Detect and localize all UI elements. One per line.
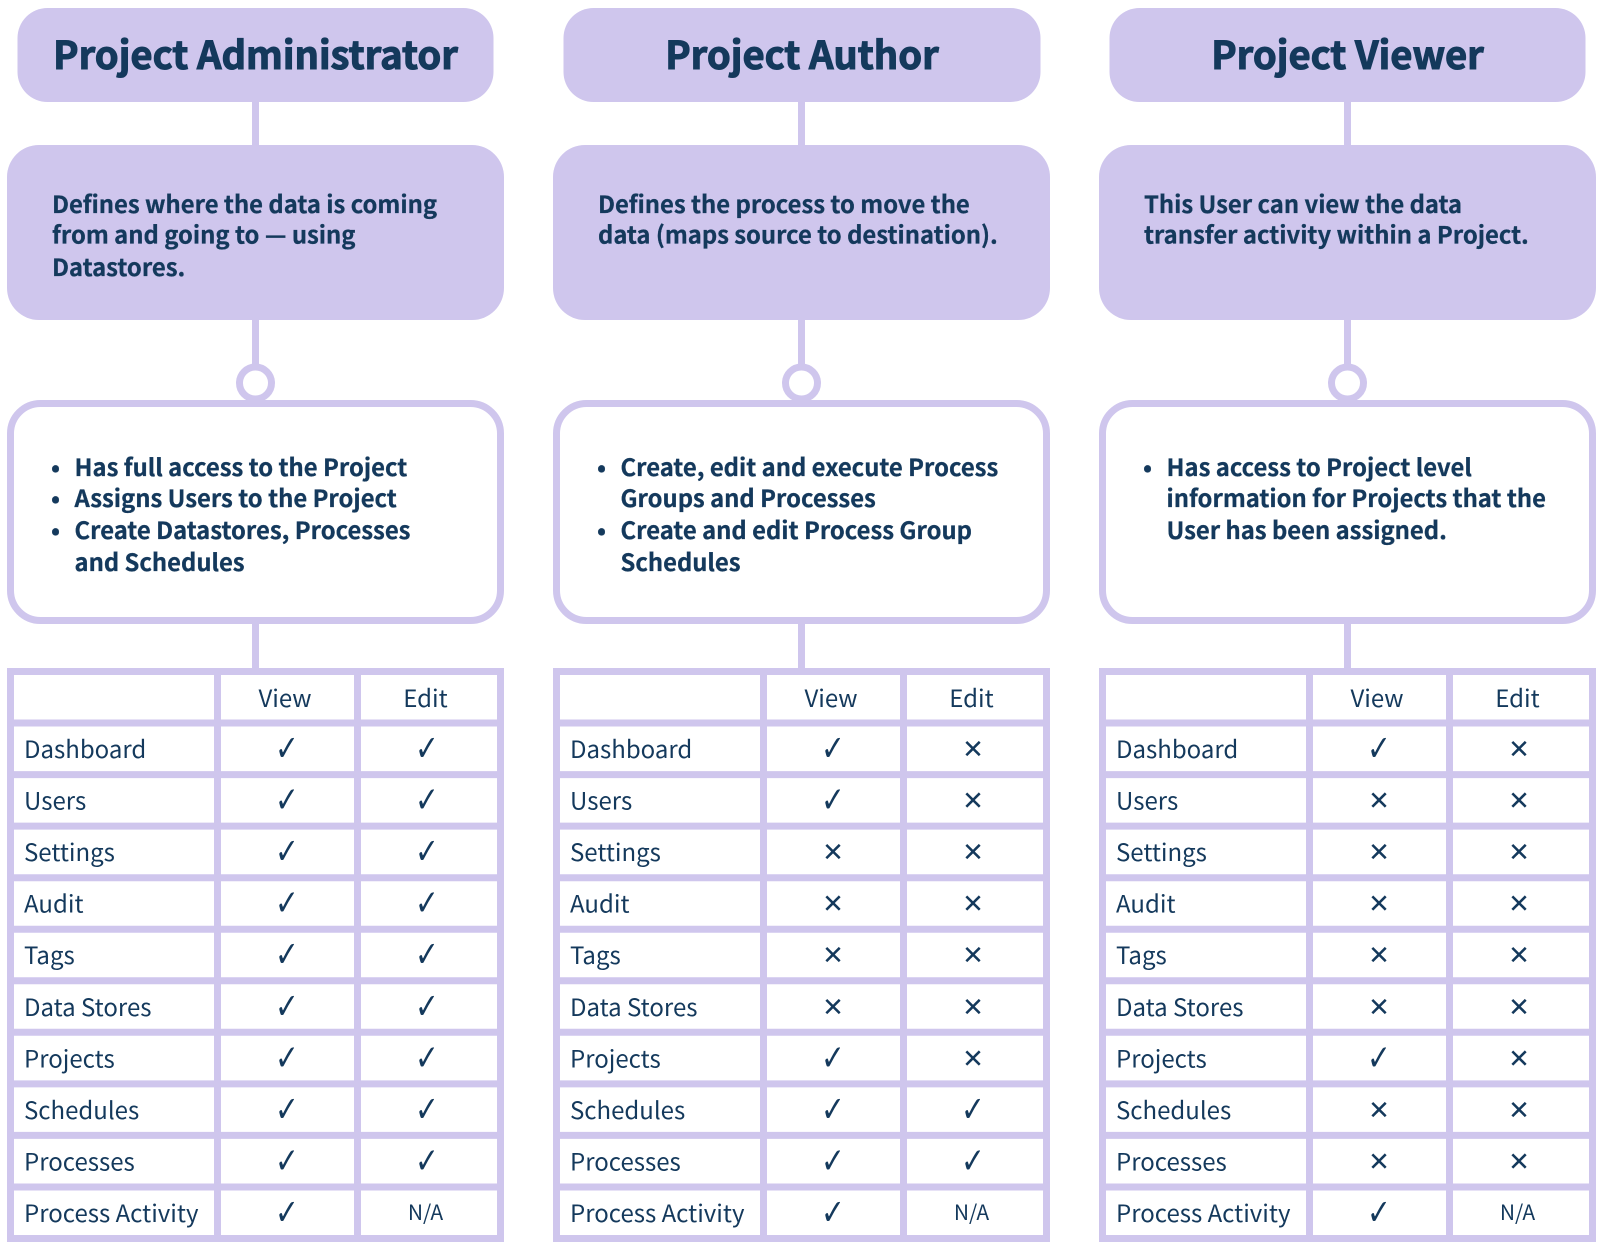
row: Processes: ✓ xyxy=(821,1140,845,1182)
row: Audit: Audit xyxy=(1116,885,1176,920)
table header: Edit xyxy=(1495,679,1540,714)
row: Audit: Audit xyxy=(24,885,84,920)
row: Data Stores: ✕ xyxy=(1368,993,1390,1023)
panel: administrator description: from and going to — using xyxy=(52,216,355,250)
row: Audit: ✕ xyxy=(822,890,844,920)
row: Data Stores xyxy=(570,988,984,1023)
panel: author responsibilities: Schedules xyxy=(620,543,741,578)
row: Processes: ✕ xyxy=(1508,1147,1530,1177)
row: Process Activity: N/A xyxy=(954,1197,989,1227)
row: Processes: Processes xyxy=(24,1142,135,1177)
panel: author responsibilities: Create, edit and execute Process xyxy=(620,448,998,483)
row: Settings: ✕ xyxy=(962,838,984,868)
row: Processes xyxy=(570,1140,985,1182)
row: Users: ✓ xyxy=(821,779,845,821)
row: Settings: ✕ xyxy=(1368,838,1390,868)
table header: View xyxy=(804,679,858,714)
row: Projects: Projects xyxy=(24,1039,115,1074)
panel: administrator responsibilities: Create Datastores, Processes xyxy=(74,511,410,546)
row: Projects xyxy=(570,1037,984,1079)
row: Settings: Settings xyxy=(1116,833,1207,868)
row: Projects: ✓ xyxy=(1367,1037,1391,1079)
row: Users: ✓ xyxy=(275,779,299,821)
panel: administrator responsibilities: • xyxy=(51,479,60,514)
panel: author responsibilities: • xyxy=(597,511,606,546)
row: Dashboard: Dashboard xyxy=(24,730,146,765)
panel: viewer responsibilities: information for Projects that the xyxy=(1166,479,1546,514)
connector: viewer xyxy=(1332,102,1364,668)
row: Process Activity: Process Activity xyxy=(570,1194,745,1229)
row: Data Stores: ✓ xyxy=(415,985,439,1027)
table: author permissions xyxy=(556,672,1046,1238)
row: Settings: Settings xyxy=(24,833,115,868)
panel: author description: Defines the process to move the xyxy=(598,185,970,220)
panel: viewer responsibilities xyxy=(1102,404,1592,620)
table header: View xyxy=(258,679,312,714)
row: Dashboard: ✕ xyxy=(1508,735,1530,765)
row: Dashboard: ✕ xyxy=(962,735,984,765)
row: Schedules: ✓ xyxy=(961,1088,985,1130)
row: Process Activity: Process Activity xyxy=(1116,1194,1291,1229)
row: Projects: ✕ xyxy=(1508,1044,1530,1074)
row: Process Activity xyxy=(1116,1191,1535,1233)
row: Data Stores: ✕ xyxy=(962,993,984,1023)
row: Users: ✕ xyxy=(962,786,984,816)
connector: administrator xyxy=(240,102,272,668)
row: Tags: ✕ xyxy=(1508,941,1530,971)
row: Audit: ✕ xyxy=(962,890,984,920)
row: Data Stores xyxy=(24,985,439,1027)
row: Settings: ✕ xyxy=(822,838,844,868)
row: Schedules: ✓ xyxy=(821,1088,845,1130)
panel: administrator description xyxy=(7,145,504,320)
row: Schedules: Schedules xyxy=(1116,1091,1231,1126)
row: Dashboard xyxy=(570,727,984,769)
row: Projects xyxy=(1116,1037,1530,1079)
row: Dashboard: ✓ xyxy=(821,727,845,769)
row: Schedules: Schedules xyxy=(24,1091,139,1126)
row: Schedules: ✕ xyxy=(1368,1096,1390,1126)
row: Audit: ✓ xyxy=(275,882,299,924)
heading: Project Author: Project Author xyxy=(665,26,939,81)
row: Settings: ✓ xyxy=(275,830,299,872)
row: Schedules: Schedules xyxy=(570,1091,685,1126)
panel: author description: data (maps source to destination). xyxy=(598,216,998,250)
row: Process Activity: N/A xyxy=(1500,1197,1535,1227)
row: Audit: ✕ xyxy=(1508,890,1530,920)
row: Tags: ✕ xyxy=(1368,941,1390,971)
row: Audit: ✕ xyxy=(1368,890,1390,920)
row: Tags: Tags xyxy=(24,936,75,971)
row: Dashboard xyxy=(1116,727,1530,769)
panel: viewer description xyxy=(1099,145,1596,320)
row: Users: ✕ xyxy=(1368,786,1390,816)
heading: Project Administrator xyxy=(18,8,494,102)
panel: author responsibilities: Groups and Processes xyxy=(620,479,876,514)
row: Process Activity: ✓ xyxy=(1367,1191,1391,1233)
row: Dashboard xyxy=(24,727,439,769)
row: Data Stores: ✕ xyxy=(822,993,844,1023)
row: Projects xyxy=(24,1037,439,1079)
row: Processes: Processes xyxy=(570,1142,681,1177)
row: Users: ✓ xyxy=(415,779,439,821)
row: Schedules: ✓ xyxy=(275,1088,299,1130)
row: Schedules: ✓ xyxy=(415,1088,439,1130)
row: Settings: ✓ xyxy=(415,830,439,872)
row: Tags: ✓ xyxy=(415,933,439,975)
panel: author description xyxy=(553,145,1050,320)
row: Processes: ✓ xyxy=(275,1140,299,1182)
row: Tags xyxy=(1116,936,1530,971)
row: Processes xyxy=(1116,1142,1530,1177)
row: Audit xyxy=(570,885,984,920)
row: Tags: Tags xyxy=(1116,936,1167,971)
row: Data Stores: ✕ xyxy=(1508,993,1530,1023)
row: Tags: ✕ xyxy=(822,941,844,971)
panel: author responsibilities: Create and edit Process Group xyxy=(620,511,972,546)
row: Dashboard: Dashboard xyxy=(1116,730,1238,765)
row: Processes xyxy=(24,1140,439,1182)
table header: Edit xyxy=(949,679,994,714)
panel: viewer responsibilities: • xyxy=(1143,448,1152,483)
row: Schedules xyxy=(570,1088,985,1130)
panel: administrator description: Defines where the data is coming xyxy=(52,185,437,220)
row: Settings xyxy=(570,833,984,868)
table header xyxy=(1350,679,1540,714)
row: Settings: Settings xyxy=(570,833,661,868)
row: Audit: Audit xyxy=(570,885,630,920)
row: Schedules xyxy=(24,1088,439,1130)
row: Projects: ✓ xyxy=(821,1037,845,1079)
row: Audit xyxy=(24,882,439,924)
row: Tags xyxy=(570,936,984,971)
row: Settings xyxy=(1116,833,1530,868)
row: Users: Users xyxy=(1116,782,1178,816)
row: Dashboard: Dashboard xyxy=(570,730,692,765)
row: Processes: ✓ xyxy=(961,1140,985,1182)
heading: Project Viewer: Project Viewer xyxy=(1211,26,1484,81)
row: Process Activity xyxy=(570,1191,989,1233)
panel: administrator description: Datastores. xyxy=(52,248,185,283)
table header: Edit xyxy=(403,679,448,714)
row: Process Activity: ✓ xyxy=(275,1191,299,1233)
row: Projects: Projects xyxy=(570,1039,661,1074)
row: Dashboard: ✓ xyxy=(415,727,439,769)
panel: administrator responsibilities: • xyxy=(51,448,60,483)
row: Tags: ✓ xyxy=(275,933,299,975)
panel: viewer responsibilities: User has been assigned. xyxy=(1166,511,1447,546)
row: Tags xyxy=(24,933,439,975)
column: Project Administrator xyxy=(7,8,504,1238)
panel: administrator responsibilities: and Schedules xyxy=(74,543,245,578)
row: Dashboard: ✓ xyxy=(1367,727,1391,769)
row: Users xyxy=(24,779,439,821)
table: administrator permissions xyxy=(10,672,500,1238)
row: Data Stores: ✓ xyxy=(275,985,299,1027)
row: Tags: ✕ xyxy=(962,941,984,971)
column: Project Author xyxy=(553,8,1050,1238)
row: Projects: ✓ xyxy=(415,1037,439,1079)
panel: administrator responsibilities: Assigns Users to the Project xyxy=(74,479,397,514)
table header xyxy=(258,679,448,714)
row: Audit: ✓ xyxy=(415,882,439,924)
row: Process Activity: N/A xyxy=(408,1197,443,1227)
panel: author responsibilities: • xyxy=(597,448,606,483)
row: Projects: ✕ xyxy=(962,1044,984,1074)
row: Settings xyxy=(24,830,439,872)
row: Process Activity: ✓ xyxy=(821,1191,845,1233)
row: Users: Users xyxy=(24,782,86,816)
panel: administrator responsibilities: • xyxy=(51,511,60,546)
row: Schedules xyxy=(1116,1091,1530,1126)
row: Users xyxy=(570,779,984,821)
table: viewer permissions xyxy=(1102,672,1592,1238)
row: Users xyxy=(1116,782,1530,816)
row: Data Stores: Data Stores xyxy=(1116,988,1244,1023)
panel: author responsibilities xyxy=(556,404,1046,620)
row: Data Stores: Data Stores xyxy=(570,988,698,1023)
connector: author xyxy=(786,102,818,668)
row: Users: Users xyxy=(570,782,632,816)
row: Users: ✕ xyxy=(1508,786,1530,816)
row: Settings: ✕ xyxy=(1508,838,1530,868)
panel: viewer responsibilities: Has access to Project level xyxy=(1166,448,1472,483)
row: Processes: ✕ xyxy=(1368,1147,1390,1177)
heading: Project Administrator: Project Administrator xyxy=(53,26,458,81)
row: Data Stores xyxy=(1116,988,1530,1023)
table header: View xyxy=(1350,679,1404,714)
row: Processes: ✓ xyxy=(415,1140,439,1182)
row: Projects: Projects xyxy=(1116,1039,1207,1074)
panel: administrator responsibilities xyxy=(10,404,500,620)
row: Dashboard: ✓ xyxy=(275,727,299,769)
table header xyxy=(804,679,994,714)
row: Tags: Tags xyxy=(570,936,621,971)
heading: Project Viewer xyxy=(1110,8,1586,102)
row: Projects: ✓ xyxy=(275,1037,299,1079)
row: Audit xyxy=(1116,885,1530,920)
panel: viewer description: transfer activity within a Project. xyxy=(1144,216,1529,250)
row: Processes: Processes xyxy=(1116,1142,1227,1177)
heading: Project Author xyxy=(564,8,1040,102)
row: Process Activity xyxy=(24,1191,443,1233)
panel: administrator responsibilities: Has full access to the Project xyxy=(74,448,407,483)
row: Data Stores: Data Stores xyxy=(24,988,152,1023)
row: Schedules: ✕ xyxy=(1508,1096,1530,1126)
row: Process Activity: Process Activity xyxy=(24,1194,199,1229)
column: Project Viewer xyxy=(1099,8,1596,1238)
panel: viewer description: This User can view the data xyxy=(1144,185,1462,220)
